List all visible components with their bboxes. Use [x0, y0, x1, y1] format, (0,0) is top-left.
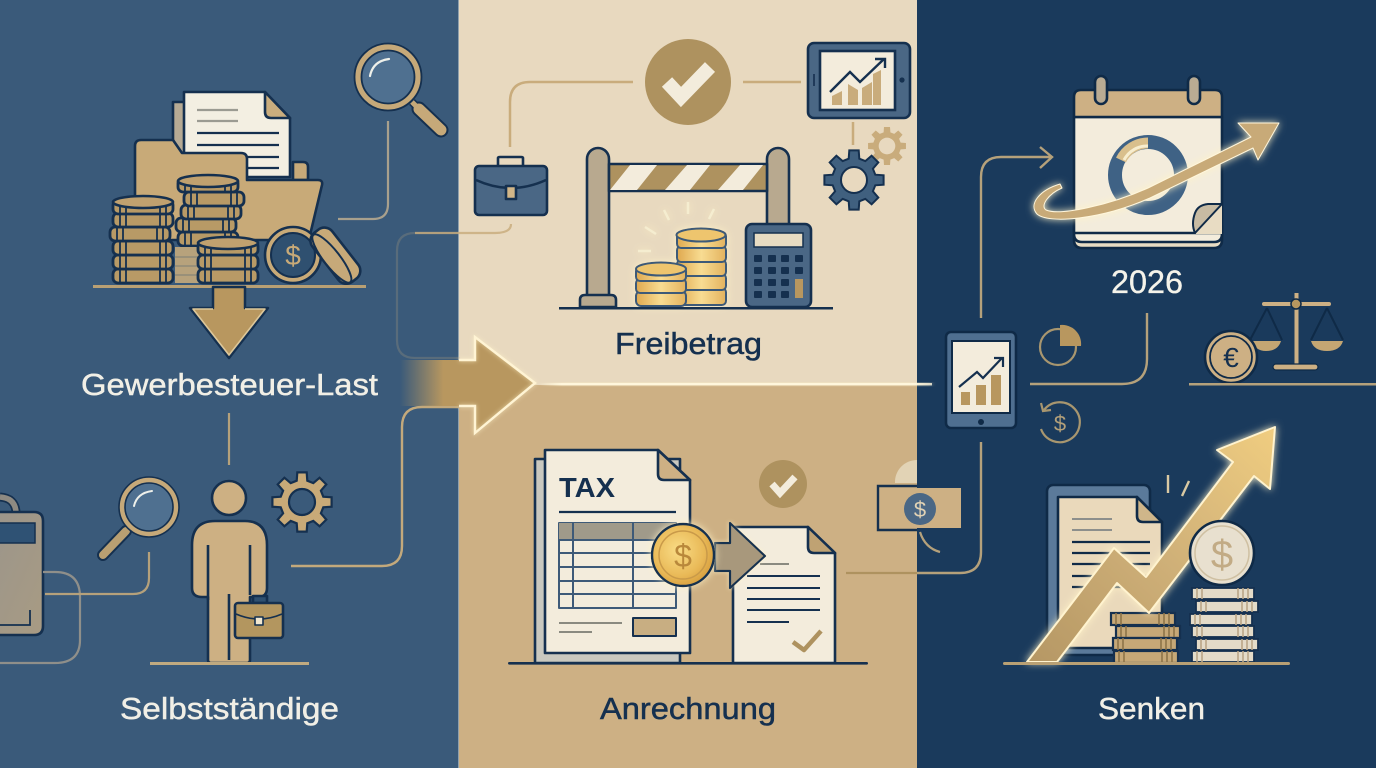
icon: dollar bill across panels: [878, 460, 961, 552]
arrow: downward burden: [190, 287, 268, 358]
icon: tax form: [535, 450, 690, 663]
heading: Senken: Senken: [1098, 691, 1205, 726]
icon: second document: [733, 527, 835, 663]
icon: euro coin: €: [1223, 342, 1239, 373]
icon: calendar ring: [1115, 142, 1181, 208]
icon: cream coin stack: [1190, 588, 1258, 662]
ground line: person: [150, 662, 309, 665]
icon: refund dollar cycle: [1041, 402, 1080, 442]
icon: tan gear: [868, 127, 906, 165]
connector: check to tablet: [743, 82, 853, 145]
icon: calculator: [746, 224, 811, 307]
icon: magnifier lower: [103, 477, 179, 555]
icon: wallet at left edge: [0, 497, 43, 635]
icon: scales: [1250, 293, 1343, 370]
icon: pie chart: [1040, 325, 1081, 365]
connector: tablet to 2026: [1030, 313, 1147, 384]
icon: gear: [272, 472, 332, 532]
connector: wallet outline and magnifier line: [0, 552, 149, 663]
icon: gold coins with rays: [636, 202, 726, 306]
icon: gold dollar coin: [652, 524, 714, 586]
icon: folder with documents: [135, 92, 322, 240]
panel: right, 2026 and Senken: [917, 0, 1376, 768]
arrow: swoosh over calendar: [1034, 123, 1279, 219]
connector: briefcase to check: [510, 82, 633, 147]
panel: middle, Freibetrag and Anrechnung: [459, 0, 917, 768]
center glowing line: [538, 383, 932, 385]
icon: barrier: [580, 148, 789, 307]
arrow: main flow into middle panel: [400, 337, 535, 433]
icon: briefcase: [475, 157, 547, 215]
text: TAX: TAX: [559, 472, 615, 503]
heading: Anrechnung: Anrechnung: [600, 691, 776, 726]
icon: document on tablet: [1047, 485, 1162, 655]
connector: tablet to calendar: [981, 147, 1052, 318]
connector: document to bill: [846, 572, 917, 574]
connector: bill to tablet: [917, 442, 981, 573]
icon: tablet with rising chart: [946, 332, 1016, 428]
icon: small check circle: [759, 460, 807, 508]
icon: calendar: [1074, 76, 1222, 248]
heading: 2026: 2026: [1111, 264, 1183, 300]
arrow: rising trend: [1027, 427, 1275, 662]
ground line: tax form: [508, 662, 868, 665]
icon: large dollar coin: [1190, 521, 1254, 585]
ground line: barrier: [559, 307, 833, 310]
icon: euro coin: [1205, 331, 1257, 383]
connector: heading to person: [228, 413, 230, 465]
icon: large dollar coin: $: [1211, 533, 1233, 577]
icon: refund dollar cycle: $: [1054, 411, 1066, 436]
ground line: Senken: [1003, 662, 1290, 665]
icon: dollar coin and leaning coin: [265, 224, 364, 288]
icon: dollar bill across panels: $: [914, 497, 926, 522]
connector: upper frame from left panel to briefcase: [397, 224, 511, 358]
spark lines: [1168, 475, 1189, 496]
icon: coin stacks: [110, 175, 258, 283]
arrow: coin transfer: [715, 523, 765, 588]
icon: navy gear: [824, 150, 884, 210]
ground line: scales: [1189, 383, 1376, 386]
shelf line: [93, 285, 366, 288]
panel: left, Gewerbesteuer-Last and Selbstständige: [0, 0, 460, 768]
icon: dollar coin and leaning coin: $: [285, 240, 301, 271]
heading: Selbstständige: Selbstständige: [120, 691, 339, 726]
icon: tan coin stack: [1111, 613, 1180, 663]
icon: magnifier top: [354, 44, 441, 130]
heading: Freibetrag: Freibetrag: [615, 326, 762, 361]
icon: check circle: [645, 39, 731, 125]
icon: gold dollar coin: $: [674, 538, 692, 574]
icon: person with briefcase: [192, 481, 283, 663]
connector: person to main arrow: [291, 407, 480, 566]
icon: tablet with chart: [808, 43, 910, 118]
heading: Gewerbesteuer-Last: Gewerbesteuer-Last: [81, 367, 378, 402]
connector: magnifier to folder: [338, 121, 388, 219]
